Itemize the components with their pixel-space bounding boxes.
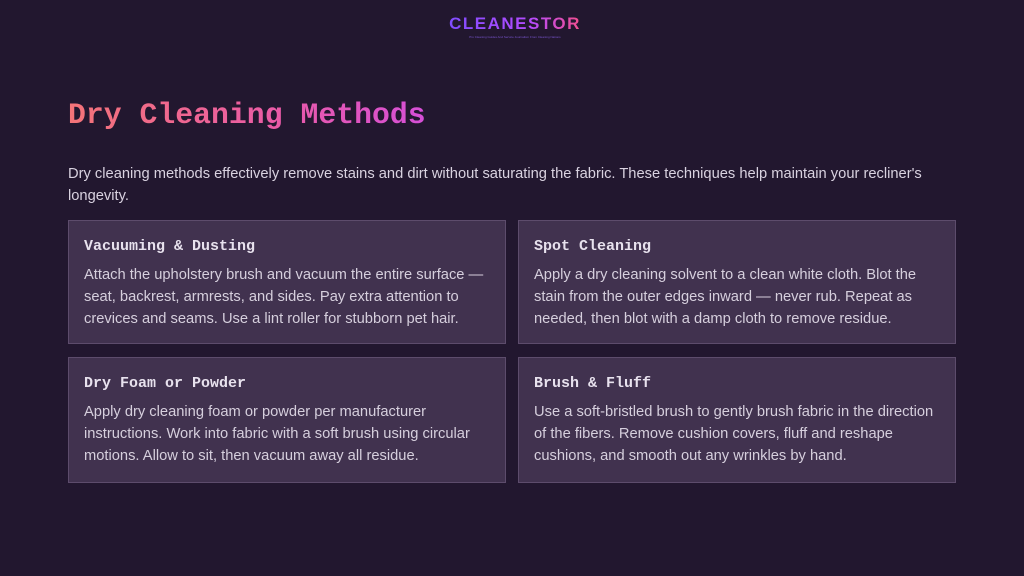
card: vacuuming: Vacuuming & Dusting — [84, 238, 255, 255]
card: spot cleaning — [518, 220, 956, 344]
card: spot cleaning: Spot Cleaning — [534, 238, 651, 255]
intro text: Dry cleaning methods effectively remove stains and dirt without saturating the fabric. These techniques help maintain your recliner's longevity. — [68, 166, 922, 204]
card: vacuuming — [68, 220, 506, 344]
card: dry foam: Apply dry cleaning foam or powder per manufacturer instructions. Work into fabric with a soft brush using circular motions. Allow to sit, then vacuum away all residue. — [84, 404, 470, 464]
card: brush: Use a soft-bristled brush to gently brush fabric in the direction of the fibers. Remove cushion covers, fluff and reshape cushions, and smooth out any wrinkles by hand. — [534, 404, 933, 464]
card: dry foam — [68, 357, 506, 483]
card: brush: Brush & Fluff — [534, 375, 651, 392]
card: dry foam: Dry Foam or Powder — [84, 375, 246, 392]
card: brush — [518, 357, 956, 483]
card: spot cleaning: Apply a dry cleaning solvent to a clean white cloth. Blot the stain from the outer edges inward — never rub. Repeat as needed, then blot with a damp cloth to remove residue. — [534, 267, 916, 327]
title: Dry Cleaning Methods — [68, 98, 426, 132]
logo: Pro Cleaning Guides And Service Journalism From Cleaning Nations — [469, 35, 561, 39]
logo: CLEANESTOR — [449, 14, 581, 33]
card: vacuuming: Attach the upholstery brush and vacuum the entire surface — seat, backrest, armrests, and sides. Pay extra attention to crevices and seams. Use a lint roller for stubborn pet hair. — [84, 267, 483, 327]
